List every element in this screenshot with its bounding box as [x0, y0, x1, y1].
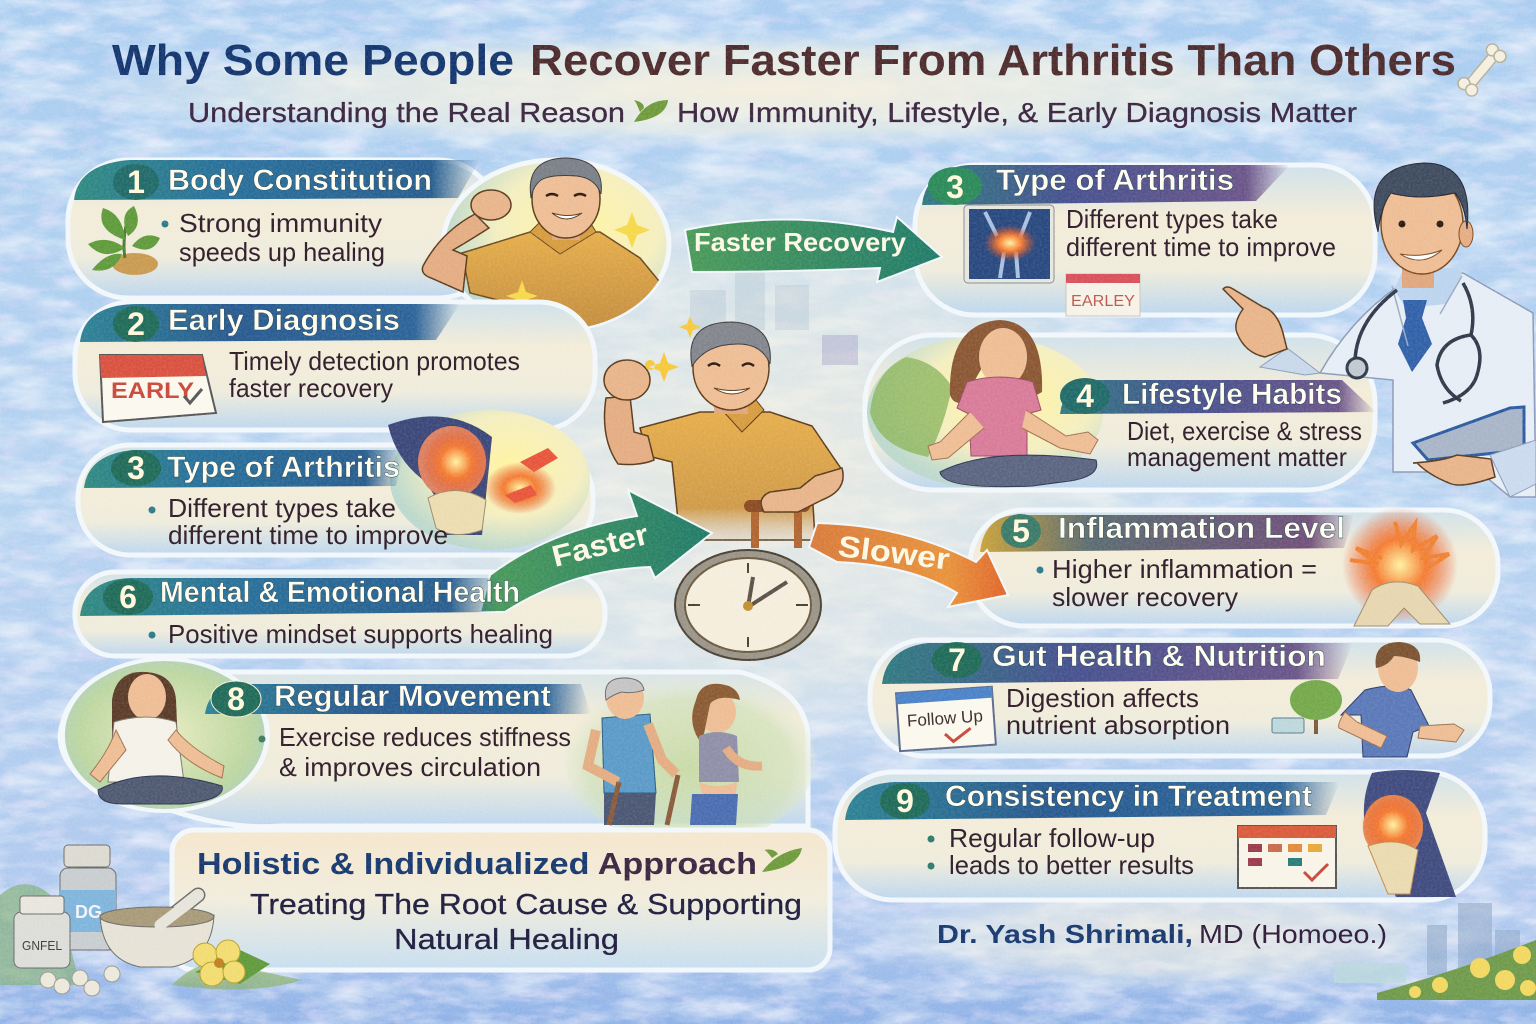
heading banner 7: Gut Health & Nutrition — [992, 640, 1326, 673]
illustration: jogging man and tree — [1272, 642, 1464, 757]
illustration: remedies — [0, 845, 302, 996]
icon: clock — [675, 550, 821, 660]
heading banner 7 — [882, 640, 1353, 684]
illustration: remedies: GNFEL — [22, 938, 62, 953]
panel: 6 mental and emotional health — [75, 572, 605, 656]
icon: bone — [1456, 41, 1508, 99]
text: gut health — [1006, 683, 1230, 740]
arrow: faster recovery: Faster Recovery — [694, 227, 907, 257]
icon: early calendar: EARLY — [111, 378, 194, 403]
illustration: treated knee — [1361, 770, 1456, 897]
arrow: slower — [809, 523, 1008, 607]
subtitle: Understanding the Real Reason — [188, 97, 625, 128]
text: type of arthritis left: Different types take — [168, 493, 396, 523]
heading banner 8 — [205, 680, 591, 717]
heading banner 6: 6 — [119, 579, 137, 615]
text: type of arthritis left: different time to improve — [168, 520, 448, 550]
heading banner 5: Inflammation Level — [1058, 512, 1345, 545]
heading banner 9 — [845, 780, 1340, 820]
icon: x-ray — [964, 205, 1054, 283]
panel: 7 gut health — [870, 640, 1490, 757]
heading banner 5: 5 — [1012, 513, 1030, 549]
illustration: inflamed joint — [1342, 507, 1458, 626]
icon: herb plant — [88, 206, 160, 275]
heading banner 7: 7 — [948, 642, 966, 678]
text: early diagnosis: faster recovery — [229, 373, 393, 403]
illustration: remedies: DG — [75, 902, 102, 922]
text: consistency — [928, 823, 1194, 880]
subtitle — [188, 97, 1357, 128]
panel: 5 inflammation level — [970, 507, 1498, 626]
heading banner 4: 4 — [1076, 378, 1094, 414]
text: consistency: Regular follow-up — [949, 823, 1155, 853]
heading banner 6: Mental & Emotional Health — [160, 576, 520, 609]
heading banner 1: Body Constitution — [168, 164, 432, 197]
text: inflammation: Higher inflammation = — [1052, 554, 1317, 584]
heading banner 2: Early Diagnosis — [168, 304, 400, 337]
text: mental health: Positive mindset supports healing — [168, 619, 553, 649]
icon: herb sprig — [762, 848, 802, 872]
heading banner 8: Regular Movement — [274, 680, 551, 713]
author credit: Dr. Yash Shrimali, — [937, 919, 1193, 949]
heading banner 5 — [980, 512, 1354, 552]
illustration: flexing man — [422, 158, 669, 335]
icon: follow up calendar: Follow Up — [906, 706, 983, 731]
panel: 8 regular movement — [60, 659, 815, 845]
text: type right: different time to improve — [1066, 232, 1336, 262]
panel: holistic approach — [172, 830, 830, 970]
heading banner right 3: Type of Arthritis — [996, 164, 1234, 197]
text: inflammation — [1036, 554, 1317, 612]
text: regular movement: Exercise reduces stiffness — [279, 722, 571, 752]
heading banner 2: 2 — [127, 306, 145, 342]
heading banner 1: 1 — [127, 164, 145, 200]
central faded city — [690, 270, 858, 365]
illustration: corner flowers and city — [1334, 903, 1536, 1000]
heading banner 9: 9 — [896, 783, 914, 819]
panel: 4 lifestyle habits — [865, 320, 1376, 490]
illustration: walking couple — [588, 677, 762, 825]
panel: 3 type of arthritis left — [78, 410, 593, 555]
icon: early calendar — [100, 355, 216, 422]
text: regular movement: & improves circulation — [279, 752, 541, 782]
title: Recover Faster From Arthritis Than Others — [530, 36, 1456, 85]
heading banner 4: Lifestyle Habits — [1122, 378, 1342, 411]
icon: small calendar: EARLEY — [1071, 293, 1135, 310]
text: lifestyle: management matter — [1127, 442, 1347, 472]
text: inflammation: slower recovery — [1052, 582, 1238, 612]
arrow: faster recovery — [685, 217, 942, 282]
illustration: yoga woman — [928, 320, 1098, 487]
heading banner 3: 3 — [127, 450, 145, 486]
arrow: faster — [480, 490, 712, 612]
text: type right — [1066, 204, 1336, 262]
title: Why Some People — [112, 36, 514, 85]
text: early diagnosis: Timely detection promotes — [229, 346, 520, 376]
illustration: inflamed knee — [388, 410, 590, 550]
heading banner 9: Consistency in Treatment — [945, 780, 1312, 813]
text: type of arthritis left — [148, 493, 448, 550]
central figure: seated man with cane — [604, 316, 843, 548]
text: early diagnosis — [229, 346, 520, 403]
text: body constitution — [162, 208, 385, 267]
text: lifestyle — [1127, 416, 1362, 472]
text: holistic subtitle — [250, 889, 802, 956]
illustration: doctor — [1223, 163, 1536, 497]
text: body constitution: Strong immunity — [179, 208, 382, 238]
author credit: MD (Homoeo.) — [1199, 919, 1387, 949]
text: holistic subtitle: Treating The Root Cause & Supporting — [250, 889, 802, 921]
text: body constitution: speeds up healing — [179, 237, 385, 267]
panel: 2 early diagnosis — [75, 302, 595, 430]
text: gut health: Digestion affects — [1006, 683, 1199, 713]
arrow: faster: Faster — [549, 518, 652, 574]
heading banner right 3: 3 — [946, 169, 964, 205]
icon: treatment calendar — [1238, 826, 1336, 888]
text: consistency: leads to better results — [949, 850, 1194, 880]
panel: 1 body constitution — [68, 160, 498, 298]
heading banner 3: Type of Arthritis — [167, 451, 400, 484]
arrow: slower: Slower — [836, 530, 952, 577]
text: gut health: nutrient absorption — [1006, 710, 1230, 740]
heading: holistic: Holistic & Individualized Approach — [197, 846, 757, 881]
heading banner 4 — [1060, 378, 1376, 414]
text: regular movement — [258, 722, 571, 782]
illustration: meditating woman — [62, 659, 267, 811]
icon: follow up calendar — [896, 687, 996, 751]
text: lifestyle: Diet, exercise & stress — [1127, 416, 1362, 446]
heading banner 6 — [80, 576, 520, 616]
title — [112, 36, 1456, 85]
author credit — [937, 919, 1387, 949]
heading banner 2 — [80, 304, 460, 342]
heading banner 3 — [84, 450, 404, 488]
heading banner right 3 — [922, 164, 1290, 205]
heading banner 1 — [74, 160, 480, 200]
text: holistic subtitle: Natural Healing — [394, 924, 619, 956]
heading banner 8: 8 — [227, 681, 245, 717]
panel: 9 consistency in treatment — [835, 770, 1485, 900]
panel: 3 type of arthritis right — [915, 164, 1375, 316]
text: type right: Different types take — [1066, 204, 1278, 234]
icon: small calendar — [1066, 274, 1140, 316]
subtitle: How Immunity, Lifestyle, & Early Diagnosis Matter — [677, 97, 1357, 128]
